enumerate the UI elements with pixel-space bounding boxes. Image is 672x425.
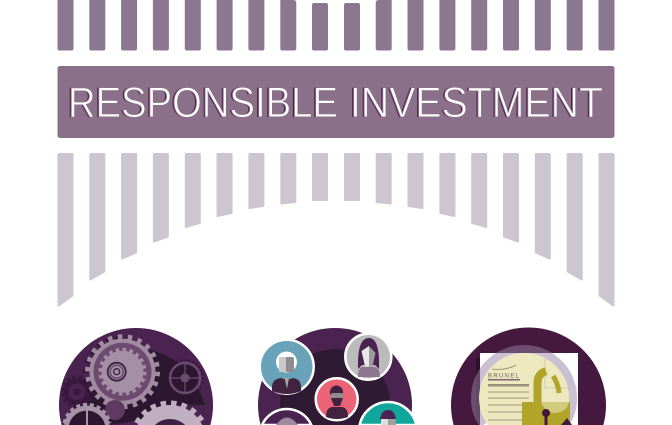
title: INVESTMENT (350, 79, 603, 127)
magnifier lens (479, 353, 569, 425)
title shadow (67, 79, 602, 127)
dark gear (62, 377, 92, 407)
avatar: red (316, 378, 358, 420)
document text (488, 365, 529, 421)
title: RESPONSIBLE (68, 79, 338, 127)
title (68, 79, 603, 127)
title shadow: RESPONSIBLE (67, 79, 337, 127)
avatar: blue (260, 340, 314, 394)
title shadow: INVESTMENT (349, 79, 602, 127)
icon: gears (59, 328, 213, 425)
top gear (86, 337, 158, 408)
document (480, 353, 578, 425)
fold lines (545, 353, 578, 388)
magnifier ring (475, 349, 573, 425)
avatar: grey (345, 334, 391, 380)
lower right gear (137, 403, 203, 425)
icon: people network (258, 328, 416, 425)
right small gear (167, 360, 203, 396)
avatar: purple (262, 409, 311, 425)
lower left gear (64, 404, 110, 425)
padlock (522, 371, 572, 425)
dark shadow band (85, 350, 205, 425)
avatar: teal (360, 402, 416, 425)
document text: BRUNEL (488, 374, 520, 380)
lower bars forming an arch (58, 154, 614, 306)
top bars (58, 0, 614, 50)
title banner (58, 66, 614, 138)
icon: document and padlock (451, 327, 606, 425)
small mid-purple gear (105, 400, 125, 420)
